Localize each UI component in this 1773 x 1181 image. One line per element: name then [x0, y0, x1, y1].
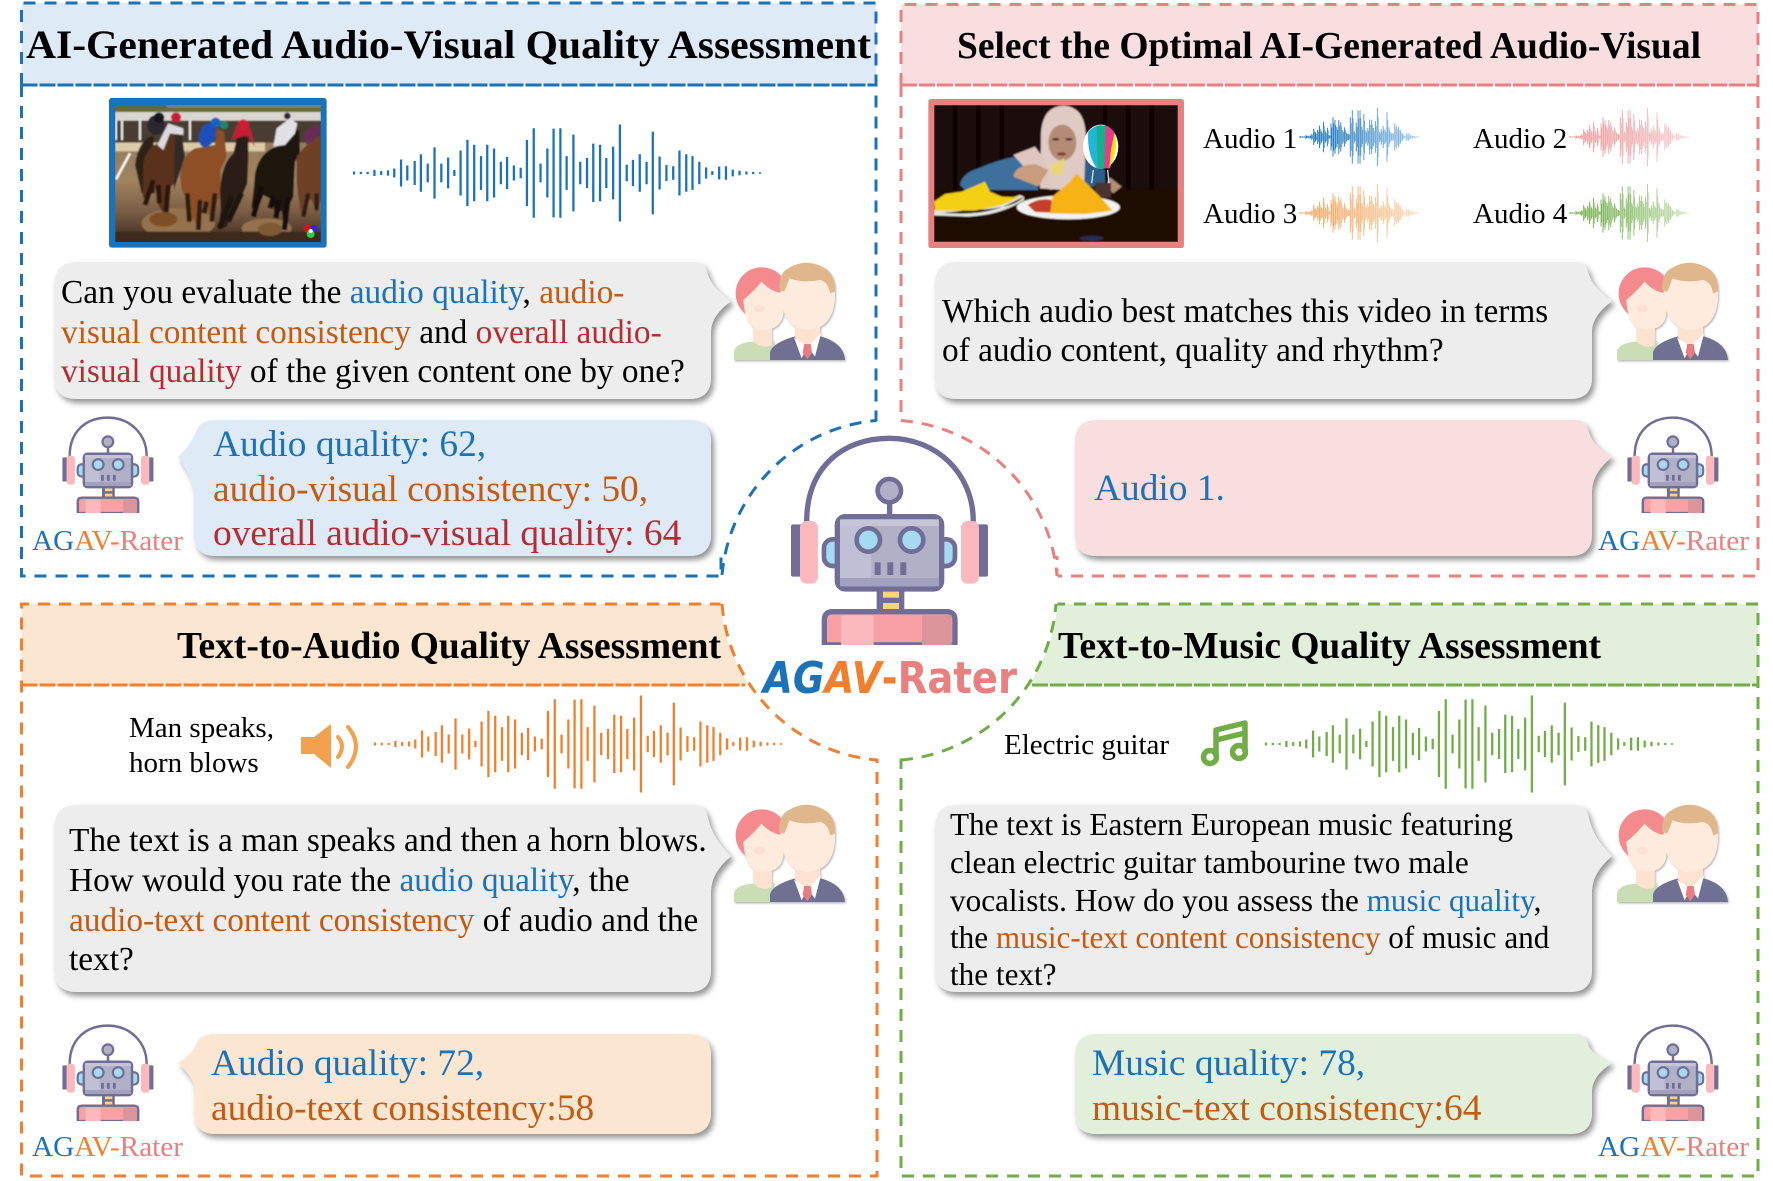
- speech bubble: model answer: audio-text consistency:58: [211, 1088, 594, 1129]
- label: AGAV-Rater: AGAV-Rater: [32, 1132, 184, 1163]
- icon: robot: [62, 418, 153, 515]
- center emblem: AGAV-Rater circle: [720, 420, 1058, 760]
- icon: robot: [62, 1026, 153, 1123]
- icon: music note: [1204, 723, 1246, 764]
- waveform: orange: [375, 695, 781, 793]
- speech bubble: user question: Can you evaluate the audio quality, audio-: [61, 274, 624, 311]
- speech bubble: user question: How would you rate the audio quality, the: [69, 862, 630, 899]
- waveform: blue: [354, 124, 760, 222]
- speech bubble: user question: [54, 262, 731, 399]
- speech bubble: user question: visual content consistency and overall audio-: [61, 314, 662, 351]
- label: AGAV-Rater: AGAV-Rater: [1598, 1132, 1750, 1163]
- waveform: green: [1266, 695, 1672, 793]
- panel: text-to-audio quality assessment: [22, 604, 877, 1176]
- speech bubble: model answer: [178, 1034, 711, 1134]
- icon: large robot: [791, 438, 988, 649]
- title: AGAV-Rater logo: AGAV-Rater: [760, 653, 1017, 704]
- speech bubble: user question: text?: [69, 941, 134, 978]
- heading: AI-generated audio-visual quality assessment: AI-Generated Audio-Visual Quality Assessment: [26, 22, 872, 67]
- speech bubble: user question: of audio content, quality and rhythm?: [942, 332, 1444, 369]
- icon: users: [1617, 263, 1728, 360]
- speech bubble: model answer: music-text consistency:64: [1092, 1088, 1482, 1129]
- speech bubble: model answer: [178, 420, 711, 556]
- icon: users: [734, 805, 845, 902]
- speech bubble: user question: [54, 805, 731, 992]
- audio prompt text: [129, 712, 274, 779]
- speech bubble: user question: audio-text content consistency of audio and the: [69, 902, 698, 939]
- icon: users: [1617, 805, 1728, 902]
- speech bubble: user question: The text is Eastern European music featuring: [950, 807, 1513, 842]
- audio option 3: Audio 3: [1203, 198, 1297, 230]
- panel: text-to-music quality assessment: [901, 604, 1758, 1176]
- speech bubble: model answer: overall audio-visual quality: 64: [213, 513, 682, 554]
- icon: speaker: [301, 724, 356, 768]
- speech bubble: model answer: [1075, 420, 1612, 556]
- speech bubble: user question: the music-text content consistency of music and: [950, 920, 1550, 955]
- heading: select the optimal audio-visual: Select the Optimal AI-Generated Audio-Visual: [957, 25, 1701, 67]
- speech bubble: user question: The text is a man speaks and then a horn blows.: [69, 822, 707, 859]
- audio option 4: Audio 4: [1473, 198, 1568, 230]
- audio option 4: [1473, 184, 1689, 242]
- image: horse race video frame: [109, 98, 327, 248]
- speech bubble: model answer: Audio quality: 62,: [213, 424, 486, 465]
- icon: robot: [1627, 418, 1718, 515]
- speech bubble: user question: [935, 805, 1612, 992]
- heading: text-to-music: Text-to-Music Quality Assessment: [1058, 625, 1601, 667]
- speech bubble: model answer: Music quality: 78,: [1092, 1043, 1365, 1084]
- panel: AI-generated audio-visual quality assessment: [22, 3, 876, 576]
- audio prompt text: horn blows: [129, 747, 259, 779]
- audio prompt text: Electric guitar: [1004, 729, 1169, 761]
- speech bubble: user question: Which audio best matches this video in terms: [942, 293, 1548, 330]
- icon: robot: [1627, 1026, 1718, 1123]
- label: AGAV-Rater: AGAV-Rater: [32, 526, 184, 557]
- icon: users: [734, 263, 845, 360]
- speech bubble: user question: [935, 262, 1612, 399]
- label: AGAV-Rater: AGAV-Rater: [1598, 526, 1750, 557]
- speech bubble: model answer: Audio quality: 72,: [211, 1043, 484, 1084]
- speech bubble: user question: the text?: [950, 957, 1057, 992]
- speech bubble: user question: visual quality of the given content one by one?: [61, 353, 685, 390]
- audio option 1: Audio 1: [1203, 123, 1297, 155]
- audio option 1: [1203, 108, 1419, 166]
- speech bubble: user question: vocalists. How do you assess the music quality,: [950, 883, 1541, 918]
- speech bubble: model answer: Audio 1.: [1094, 468, 1225, 509]
- image: woman eating video frame: [928, 99, 1184, 248]
- speech bubble: model answer: [1075, 1034, 1612, 1134]
- speech bubble: user question: clean electric guitar tambourine two male: [950, 845, 1469, 880]
- audio option 2: [1473, 108, 1689, 166]
- audio option 3: [1203, 184, 1419, 242]
- speech bubble: model answer: audio-visual consistency: 50,: [213, 469, 648, 510]
- audio option 2: Audio 2: [1473, 123, 1567, 155]
- heading: text-to-audio: Text-to-Audio Quality Assessment: [177, 625, 721, 667]
- audio prompt text: Man speaks,: [129, 712, 274, 744]
- panel: select the optimal AI-generated audio-visual: [901, 4, 1758, 576]
